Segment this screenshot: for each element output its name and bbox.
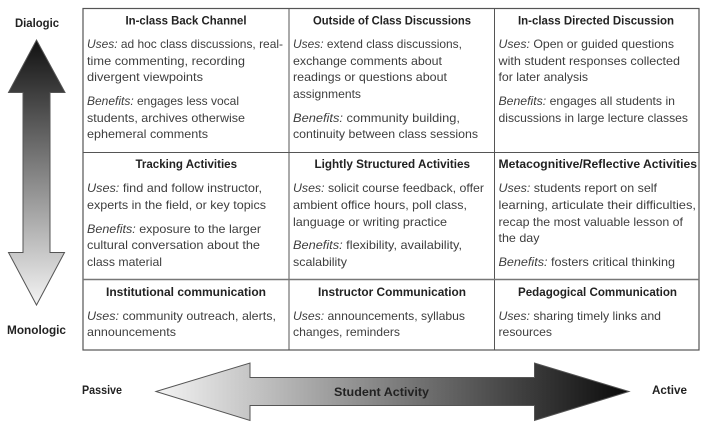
- uses text: Uses: announcements, syllabus: [293, 309, 465, 323]
- uses text: Uses: ad hoc class discussions, real-: [87, 37, 283, 51]
- uses text: Uses: find and follow instructor,: [87, 181, 262, 195]
- uses text: assignments: [293, 87, 361, 101]
- heading: Institutional communication: [106, 287, 266, 299]
- benefits text: Benefits: flexibility, availability,: [293, 238, 462, 252]
- uses text: changes, reminders: [293, 325, 400, 339]
- uses text: [293, 309, 465, 339]
- benefits text: discussions in large lecture classes: [498, 111, 688, 125]
- benefits text: [87, 222, 261, 269]
- cell: Instructor Communication: [293, 287, 466, 339]
- uses text: Uses: solicit course feedback, offer: [293, 181, 484, 195]
- heading: Lightly Structured Activities: [314, 159, 470, 171]
- uses text: exchange comments about: [293, 54, 443, 68]
- benefits text: [293, 238, 462, 269]
- uses text: Uses: extend class discussions,: [293, 37, 462, 51]
- heading: In-class Directed Discussion: [518, 16, 674, 28]
- uses text: announcements: [87, 325, 176, 339]
- uses text: [497, 37, 680, 84]
- uses text: [498, 181, 696, 245]
- matrix grid: [83, 8, 699, 350]
- uses text: Uses: Open or guided questions: [498, 37, 674, 51]
- benefits text: Benefits: engages less vocal: [87, 94, 239, 108]
- benefits text: Benefits: engages all students in: [498, 94, 675, 108]
- uses text: [498, 309, 661, 339]
- uses text: experts in the field, or key topics: [87, 198, 266, 212]
- benefits text: Benefits: community building,: [293, 111, 460, 125]
- uses text: [293, 181, 484, 229]
- uses text: Uses: community outreach, alerts,: [87, 309, 276, 323]
- cell: Metacognitive/Reflective Activities: [498, 159, 697, 269]
- label: Active: Active: [652, 385, 687, 397]
- uses text: Uses: sharing timely links and: [498, 309, 661, 323]
- benefits text: [87, 94, 245, 141]
- cell: Lightly Structured Activities: [293, 159, 484, 269]
- cell: Institutional communication: [87, 287, 276, 339]
- uses text: divergent viewpoints: [87, 70, 203, 84]
- uses text: the day: [498, 231, 540, 245]
- heading: Outside of Class Discussions: [313, 16, 471, 28]
- cell: Tracking Activities: [87, 159, 266, 269]
- heading: Tracking Activities: [136, 159, 237, 171]
- benefits text: Benefits: fosters critical thinking: [498, 255, 675, 269]
- uses text: recap the most valuable lesson of: [498, 215, 684, 229]
- benefits text: [293, 111, 478, 141]
- benefits text: Benefits: exposure to the larger: [87, 222, 261, 236]
- heading: Instructor Communication: [318, 287, 466, 299]
- benefits text: class material: [87, 255, 162, 269]
- uses text: for later analysis: [498, 70, 588, 84]
- label: Monologic: Monologic: [7, 325, 67, 337]
- benefits text: continuity between class sessions: [293, 127, 478, 141]
- cell: In-class Directed Discussion: [497, 16, 688, 125]
- cell: In-class Back Channel: [87, 16, 283, 141]
- horizontal arrow: student activity: [156, 363, 629, 420]
- uses text: [293, 37, 462, 101]
- cell: Outside of Class Discussions: [293, 16, 478, 141]
- cell: Pedagogical Communication: [498, 287, 677, 339]
- uses text: [87, 181, 266, 212]
- uses text: Uses: students report on self: [498, 181, 658, 195]
- uses text: time commenting, recording: [87, 54, 245, 68]
- vertical arrow: dialogic to monologic: [8, 40, 65, 305]
- benefits text: cultural conversation about the: [87, 238, 260, 252]
- uses text: [87, 309, 276, 339]
- label: Student Activity: Student Activity: [334, 387, 430, 399]
- uses text: language or writing practice: [293, 215, 447, 229]
- benefits text: scalability: [293, 255, 347, 269]
- uses text: [87, 37, 283, 84]
- uses text: with student responses collected: [497, 54, 680, 68]
- label: Passive: Passive: [82, 385, 122, 397]
- heading: Pedagogical Communication: [518, 287, 677, 299]
- uses text: resources: [498, 325, 552, 339]
- uses text: readings or questions about: [293, 70, 448, 84]
- label: Dialogic: Dialogic: [15, 18, 60, 30]
- benefits text: [498, 94, 688, 125]
- benefits text: students, archives otherwise: [87, 111, 245, 125]
- heading: In-class Back Channel: [126, 16, 246, 28]
- heading: Metacognitive/Reflective Activities: [498, 159, 697, 171]
- benefits text: ephemeral comments: [87, 127, 208, 141]
- uses text: learning, articulate their difficulties,: [498, 198, 696, 212]
- uses text: ambient office hours, poll class,: [293, 198, 467, 212]
